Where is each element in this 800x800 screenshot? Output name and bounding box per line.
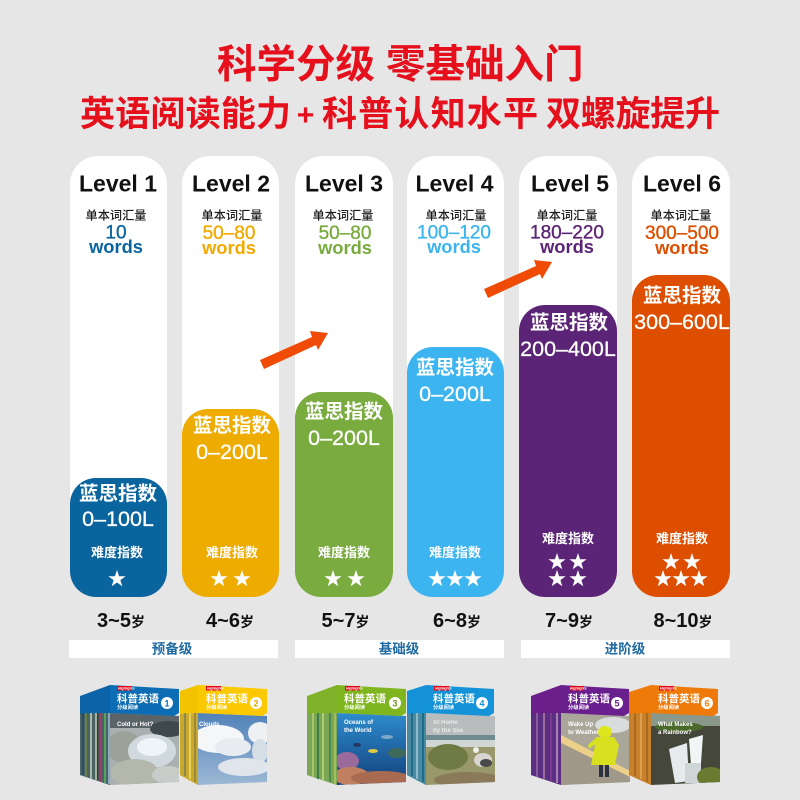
level 6 heading: Level 6: [643, 170, 721, 196]
book set 1: 1: [164, 698, 170, 708]
level 4 heading: Level 4: [416, 170, 494, 196]
tier band: foundation: 基础级: [379, 638, 420, 658]
book set 4: At Home: [433, 720, 458, 726]
level 6 vocabulary: 单本词汇量: [651, 206, 711, 224]
level 4 difficulty bar: [407, 347, 504, 597]
book set 2: 2: [253, 698, 259, 708]
level 2 difficulty bar: 0–200L: [196, 440, 268, 464]
level 3 difficulty bar: [295, 392, 393, 597]
title line 2: 双螺旋提升: [546, 86, 720, 137]
level 6 difficulty bar: 蓝思指数: [643, 279, 721, 308]
level 3 vocabulary: words: [317, 237, 372, 258]
level 1 difficulty bar: 0–100L: [82, 507, 154, 531]
tier band: advanced: [521, 638, 730, 658]
book set 3: Oceans of: [344, 720, 374, 726]
level 6 difficulty bar: [632, 275, 730, 597]
book set 1: 分级阅读: [117, 703, 139, 711]
panel: level 6: [632, 156, 730, 597]
book set 6: 科普英语: [658, 691, 700, 706]
level 6 vocabulary: 300–500: [645, 223, 719, 244]
level 2 heading: Level 2: [192, 170, 270, 196]
book set 1: [80, 685, 186, 787]
level 4 difficulty bar: 0–200L: [419, 382, 491, 406]
panel: level 2: [182, 156, 279, 597]
book set 5: to Weather: [568, 730, 600, 736]
book set 2: 科普英语: [206, 691, 248, 706]
level 1 heading: Level 1: [79, 170, 157, 196]
book set 6: 分级阅读: [658, 703, 680, 711]
age labels: 8~10岁: [653, 610, 713, 632]
level 2 difficulty bar: 蓝思指数: [193, 409, 271, 438]
level 4 vocabulary: [417, 206, 491, 257]
level 3 vocabulary: 单本词汇量: [313, 206, 373, 224]
book 2 logo: Highlights: [207, 686, 224, 690]
level 1 difficulty bar: 蓝思指数: [79, 477, 157, 506]
level 4 difficulty bar: 难度指数: [429, 542, 481, 561]
level 6 vocabulary: [645, 206, 719, 258]
panel: level 4: [407, 156, 504, 597]
panel: level 5: [519, 156, 617, 597]
book set 2: Clouds: [199, 722, 220, 728]
level 4 vocabulary: words: [426, 236, 481, 257]
arrow: level 2 to 3: [260, 331, 328, 369]
book 6 logo: Highlights: [660, 686, 677, 690]
book set 4: 4: [479, 698, 485, 708]
level 5 vocabulary: 180–220: [530, 222, 604, 244]
level 3 difficulty bar: 蓝思指数: [305, 395, 383, 424]
book set 4: by the Sea: [433, 728, 464, 734]
book set 5: 分级阅读: [568, 703, 590, 711]
level 4 vocabulary: 100–120: [417, 222, 491, 244]
tier band: foundation: [295, 638, 504, 658]
level 6 vocabulary: words: [654, 237, 709, 258]
level 5 vocabulary: [530, 206, 604, 257]
level 5 difficulty bar: 蓝思指数: [530, 306, 608, 335]
level 2 difficulty bar: [182, 409, 279, 597]
book 4 logo: Highlights: [435, 686, 452, 690]
level 2 vocabulary: 单本词汇量: [202, 206, 262, 224]
level 3 difficulty bar: 难度指数: [318, 542, 370, 561]
book 3 logo: Highlights: [346, 686, 363, 690]
level 2 vocabulary: words: [201, 237, 256, 258]
title line 2: +: [297, 99, 314, 132]
level 5 difficulty bar: [519, 305, 617, 597]
book set 5: 科普英语: [568, 691, 610, 706]
book set 3: the World: [344, 728, 372, 734]
panel: level 1: [70, 156, 167, 597]
book set 1: 科普英语: [117, 691, 159, 706]
age labels: 7~9岁: [545, 610, 593, 632]
book set 3: 科普英语: [344, 691, 386, 706]
tier band: preparatory: [69, 638, 278, 658]
book set 4: 分级阅读: [433, 703, 455, 711]
level 5 difficulty bar: 200–400L: [520, 337, 616, 361]
level 3 vocabulary: [313, 206, 373, 258]
level 1 vocabulary: words: [88, 236, 143, 257]
level 2 vocabulary: [201, 206, 262, 258]
title line 1: 零基础入门: [386, 33, 584, 90]
book 1 logo: Highlights: [118, 686, 135, 690]
level 3 vocabulary: 50–80: [319, 223, 371, 244]
age labels: 4~6岁: [206, 610, 254, 632]
book set 6: What Makes: [658, 722, 693, 728]
book set 6: a Rainbow?: [658, 730, 692, 736]
book set 5: [531, 685, 631, 787]
book set 3: [307, 685, 411, 786]
title line 2: [80, 86, 720, 137]
level 1 difficulty bar: 难度指数: [91, 542, 143, 561]
age labels: [97, 610, 713, 632]
book set 1: Cold or Hot?: [117, 722, 154, 728]
book set 3: 分级阅读: [344, 703, 366, 711]
level 6 difficulty bar: 难度指数: [656, 528, 708, 547]
book 5 logo: Highlights: [570, 686, 587, 690]
level 3 heading: Level 3: [305, 170, 383, 196]
title line 2: 科普认知水平: [322, 86, 538, 137]
age labels: 3~5岁: [97, 610, 145, 632]
age labels: 6~8岁: [433, 610, 481, 632]
tier band: preparatory: 预备级: [152, 638, 193, 658]
arrow: level 4 to 5: [484, 260, 552, 298]
tier band: advanced: 进阶级: [605, 638, 646, 658]
level 4 vocabulary: 单本词汇量: [426, 206, 486, 224]
title line 2: 英语阅读能力: [80, 86, 291, 137]
level 1 difficulty bar: [70, 477, 167, 597]
level 1 vocabulary: [86, 206, 146, 257]
age labels: 5~7岁: [322, 610, 369, 632]
book set 6: [629, 685, 725, 787]
title line 1: 科学分级: [217, 33, 375, 90]
book set 2: 分级阅读: [206, 703, 228, 711]
book set 2: [180, 685, 272, 786]
title line 1: [217, 33, 584, 90]
panel: level 3: [295, 156, 393, 597]
book set 4: [407, 685, 495, 785]
book set 3: 3: [392, 698, 398, 708]
book set 6: 6: [704, 698, 710, 708]
book set 4: 科普英语: [433, 691, 475, 706]
level 1 vocabulary: 单本词汇量: [86, 206, 146, 224]
level 2 difficulty bar: 难度指数: [206, 542, 258, 561]
level 5 vocabulary: words: [539, 236, 594, 257]
level 5 difficulty bar: 难度指数: [542, 528, 594, 547]
level 3 difficulty bar: 0–200L: [308, 426, 380, 450]
level 6 difficulty bar: 300–600L: [634, 310, 730, 334]
level 5 vocabulary: 单本词汇量: [537, 206, 597, 224]
level 5 heading: Level 5: [531, 170, 609, 196]
level 2 vocabulary: 50–80: [203, 223, 255, 244]
book set 5: 5: [614, 698, 620, 708]
level 1 vocabulary: 10: [105, 222, 127, 244]
book set 5: Wake Up: [568, 722, 593, 728]
level 4 difficulty bar: 蓝思指数: [416, 351, 494, 380]
